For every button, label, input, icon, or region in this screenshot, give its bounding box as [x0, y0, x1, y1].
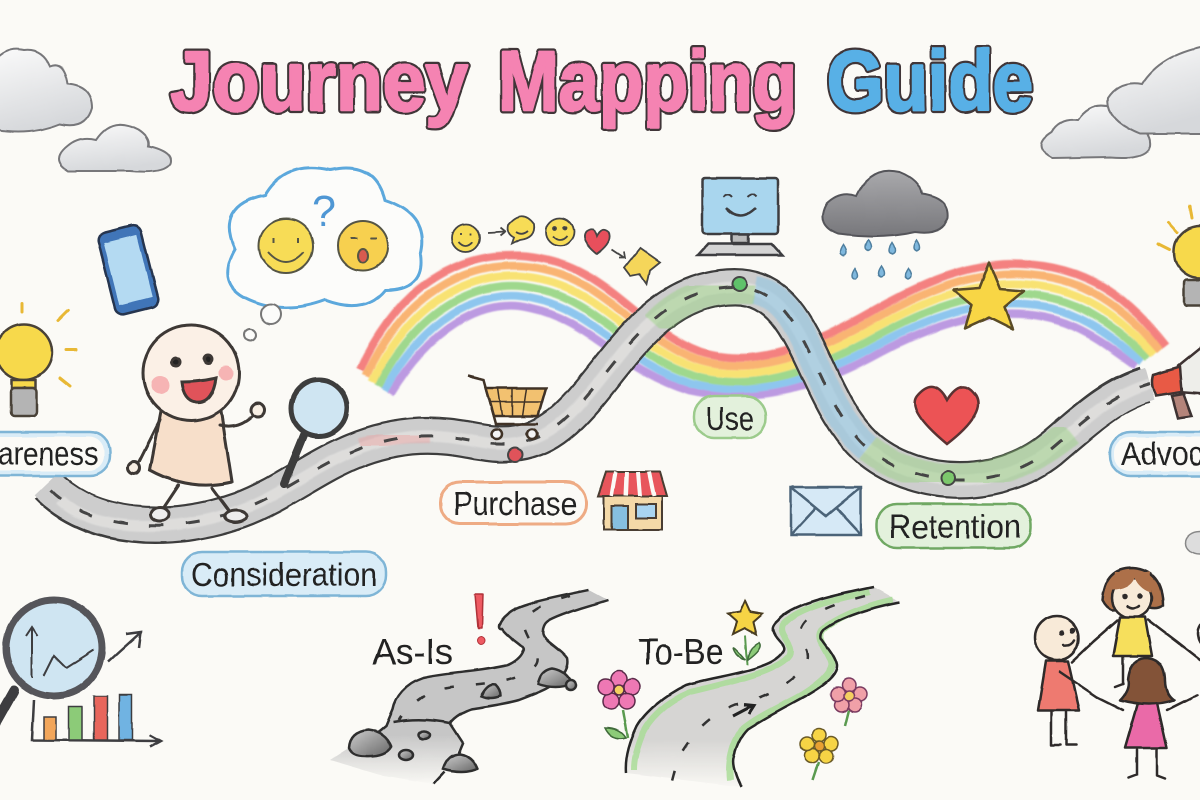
title: Journey	[170, 34, 468, 128]
person: red	[1035, 616, 1123, 745]
title	[170, 34, 1033, 128]
icon: light bulb right	[1158, 206, 1200, 306]
label: Use: Use	[706, 400, 754, 437]
thought bubble surprised face	[338, 221, 388, 271]
to-be road	[626, 587, 900, 790]
main road	[46, 287, 1150, 526]
cloud: top left	[0, 49, 92, 132]
thought bubble smile face	[259, 219, 313, 273]
arrow on to-be road	[733, 705, 754, 716]
icon: analytics magnifier and bar chart	[0, 600, 161, 747]
icon: envelope	[791, 487, 861, 535]
icon: light bulb left	[0, 304, 76, 416]
icon: computer	[698, 178, 782, 255]
label: Retention: Retention	[889, 508, 1021, 545]
icon: phone	[96, 224, 160, 316]
title: Journey	[170, 34, 468, 128]
text: As-Is: As-Is	[372, 631, 453, 672]
icon: store	[598, 472, 667, 530]
icon: shopping cart	[468, 376, 546, 439]
waypoint dots	[508, 277, 955, 485]
icon: megaphone	[1152, 344, 1200, 418]
rainbow	[360, 255, 1166, 396]
person: pink	[1120, 658, 1197, 778]
emoji journey row	[452, 216, 660, 284]
flower: yellow star	[728, 601, 762, 665]
label: Purchase: Purchase	[453, 485, 577, 522]
icon: exclamation	[475, 594, 485, 644]
icon: magnifying glass	[284, 380, 347, 484]
flower: pink left	[598, 671, 640, 739]
person: yellow	[1072, 568, 1200, 687]
cloud: small right	[1041, 106, 1150, 158]
title: Mapping	[498, 34, 797, 128]
character	[128, 325, 265, 522]
person: right edge	[1198, 625, 1200, 642]
cloud: top right	[1108, 46, 1200, 134]
thought bubble: ?	[312, 187, 336, 236]
label: Consideration: Consideration	[191, 556, 377, 593]
label: Awareness: areness	[0, 435, 98, 472]
cloud: small left	[59, 125, 171, 172]
as-is road	[330, 590, 608, 784]
flower: yellow bottom	[800, 728, 838, 780]
rocks	[349, 668, 576, 772]
title: Mapping	[498, 34, 797, 128]
thought bubble	[228, 168, 422, 341]
people holding hands	[1035, 568, 1200, 778]
icon: star	[954, 262, 1024, 329]
icon: heart	[915, 387, 978, 444]
cloud: edge right	[1186, 532, 1200, 554]
flower: pink right	[831, 678, 867, 726]
icon: rain cloud	[822, 171, 948, 279]
title: Guide	[827, 34, 1033, 128]
title: Guide	[827, 34, 1033, 128]
text: To-Be: To-Be	[638, 631, 724, 672]
